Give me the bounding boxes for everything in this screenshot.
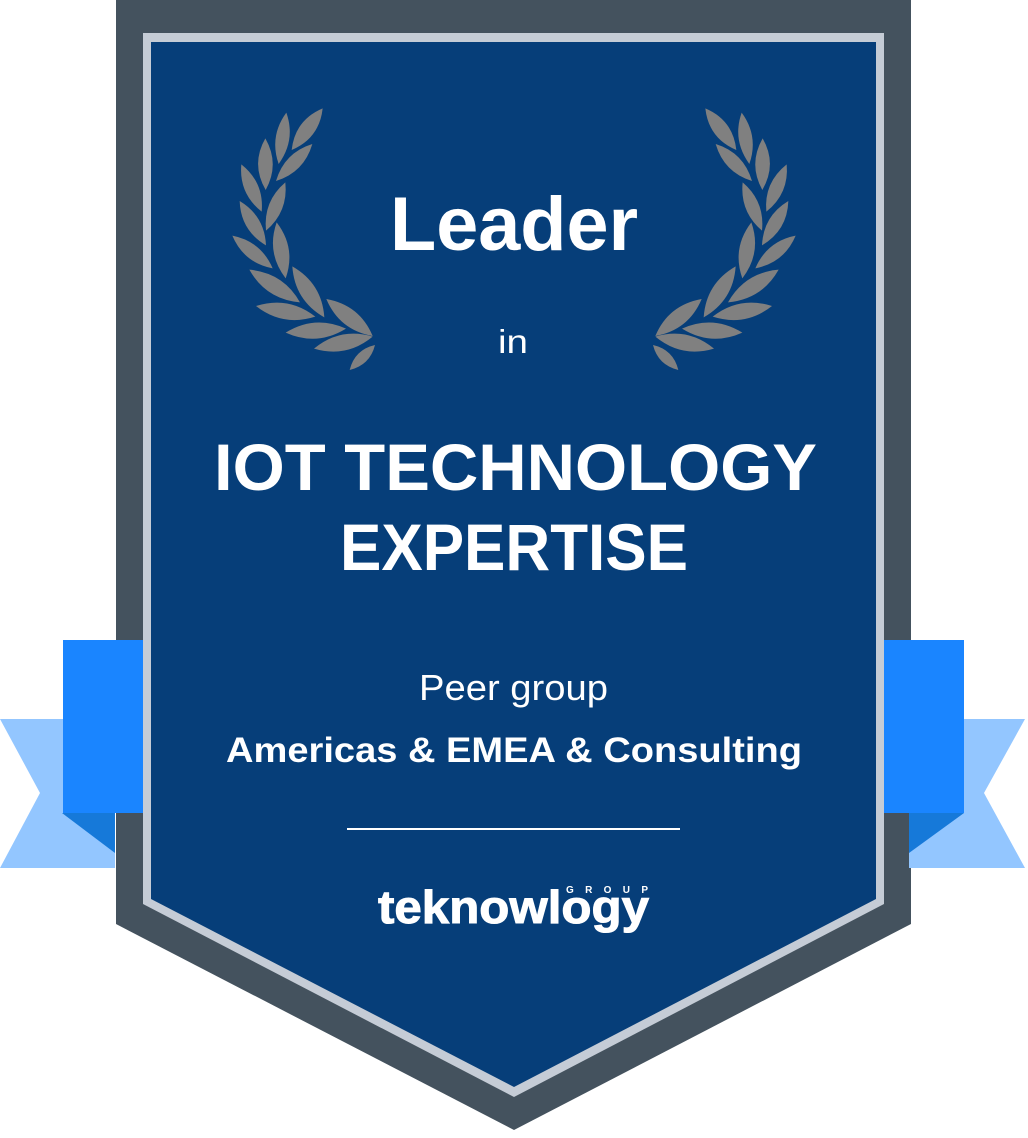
laurel right: [653, 108, 796, 370]
laurel left: [232, 108, 375, 370]
shield outer frame: [116, 0, 911, 1130]
shield panel: [151, 42, 876, 1087]
text: peer group label: Peer group: [419, 667, 608, 708]
heading: Leader: Leader: [390, 182, 638, 267]
text: peer group name: Americas & EMEA & Consulting: [226, 731, 802, 770]
right ribbon: [884, 640, 1025, 868]
title line 1: IOT TECHNOLOGY: [214, 430, 817, 504]
text: in: in: [498, 323, 528, 360]
logo: teknowlogy group: teknowlogy: [378, 881, 649, 933]
ribbon overlap left: [116, 640, 143, 813]
logo: teknowlogy group: GROUP: [566, 885, 648, 896]
title line 2: EXPERTISE: [340, 510, 688, 584]
shield light border: [143, 33, 884, 1097]
left ribbon: [0, 640, 145, 868]
